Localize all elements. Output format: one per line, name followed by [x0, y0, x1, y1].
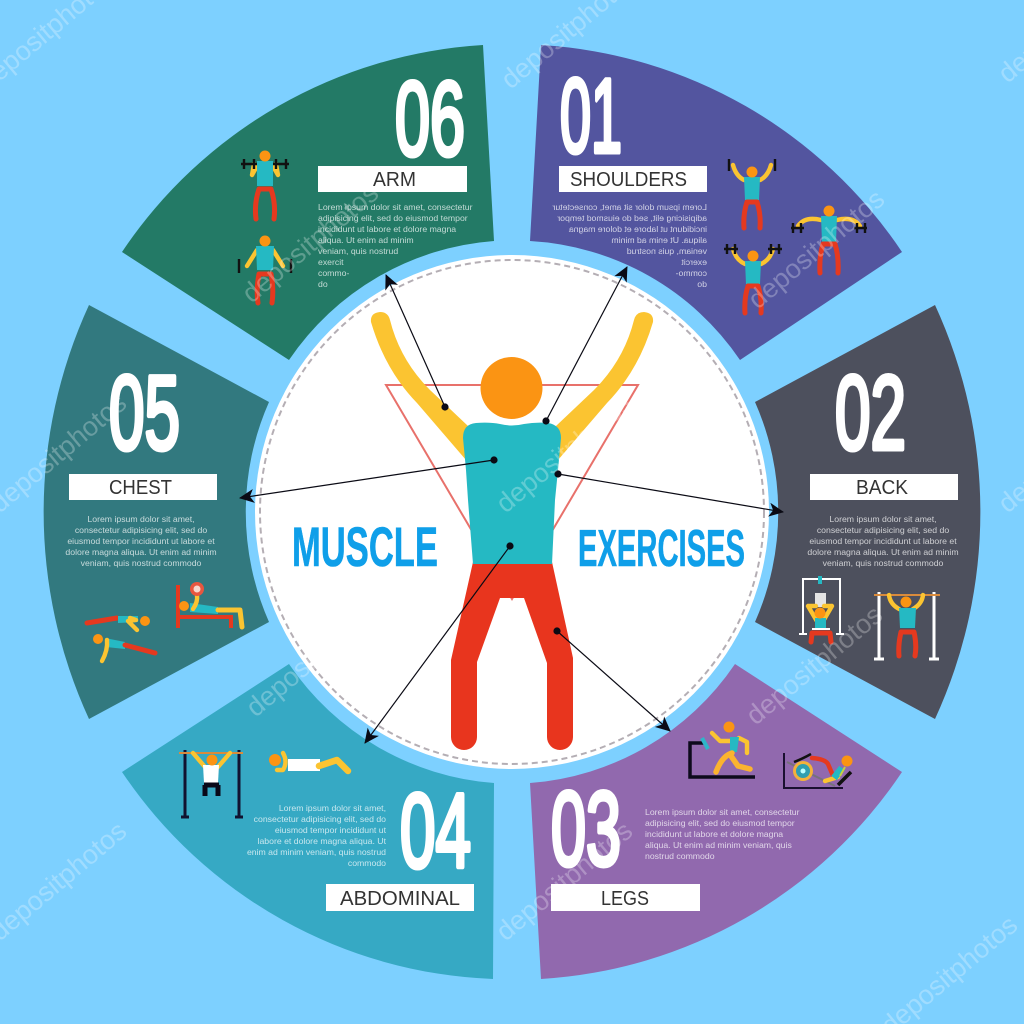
panel: 06 arm: ARM: [373, 169, 416, 191]
panel: 05 chest: dolore magna aliqua. Ut enim ad minim: [65, 547, 217, 557]
panel: 02 back: Lorem ipsum dolor sit amet,: [829, 514, 937, 524]
panel: 04 abdominal: consectetur adipisicing elit, sed do: [254, 814, 386, 824]
icon: hanging leg raise: [179, 750, 243, 817]
panel: 03 legs: LEGS: [601, 888, 649, 910]
panel: 05 chest: CHEST: [109, 477, 172, 499]
mirrored body text: adipisicing elit, sed do eiusmod tempor: [557, 213, 707, 223]
arrow: back: [554, 470, 783, 512]
icon: push-up top: [87, 616, 150, 630]
panel: 02 back: consectetur adipisicing elit, sed do: [817, 525, 949, 535]
mirrored body text: veniam, quis nostrud: [627, 246, 707, 256]
panel: 04 abdominal: Lorem ipsum dolor sit amet,: [279, 803, 386, 813]
panel: 06 arm: incididunt ut labore et dolore magna: [318, 224, 456, 234]
heading: exercises: EXERCISES: [578, 520, 745, 578]
panel: 05 chest: [44, 305, 269, 719]
icon: crunch exercise: [269, 753, 348, 771]
panel: 05 chest: consectetur adipisicing elit, sed do: [75, 525, 207, 535]
panel: 04 abdominal: commodo: [348, 858, 386, 868]
panel: 04 abdominal: ABDOMINAL: [340, 888, 460, 910]
panel: 03 legs: incididunt ut labore et dolore magna: [645, 829, 783, 839]
panel: 03 legs: aliqua. Ut enim ad minim veniam, quis: [645, 840, 792, 850]
central figure: [371, 312, 653, 750]
panel: 01 shoulders: [530, 45, 902, 360]
panel: 04 abdominal: 04: [400, 773, 471, 890]
icon: push-up bottom: [93, 634, 155, 661]
torso: [463, 423, 561, 564]
watermark text: depositphotos: [236, 178, 384, 309]
mirrored body text: do: [697, 279, 707, 289]
panel: 02 back: 02: [835, 355, 906, 472]
central white circle: [255, 255, 769, 769]
panel: 02 back: veniam, quis nostrud commodo: [823, 558, 944, 568]
right arm: [556, 312, 653, 460]
panel: 06 arm: Lorem ipsum dolor sit amet, consectetur: [318, 202, 473, 212]
panel: 06 arm: adipisicing elit, sed do eiusmod tempor: [318, 213, 468, 223]
panel: 02 back: BACK: [856, 477, 909, 499]
panel: 03 legs: adipisicing elit, sed do eiusmod tempor: [645, 818, 795, 828]
icon: lat pulldown machine: [799, 576, 844, 642]
panel: 03 legs: Lorem ipsum dolor sit amet, consectetur: [645, 807, 800, 817]
panel: 03 legs: nostrud commodo: [645, 851, 715, 861]
arrow: shoulders: [542, 267, 627, 425]
arrow: arm: [386, 275, 449, 411]
icon: figure shoulder curl: [241, 150, 289, 219]
mirrored body text: [552, 202, 707, 289]
panel: 05 chest: veniam, quis nostrud commodo: [81, 558, 202, 568]
heading: muscle: MUSCLE: [292, 515, 438, 578]
icon: treadmill runner: [690, 722, 755, 777]
triangle outline: [386, 385, 638, 599]
arrow: legs: [553, 627, 670, 731]
panel: 05 chest: 05: [109, 355, 180, 472]
head: [480, 357, 542, 419]
panel: 02 back: [755, 305, 980, 719]
icon: figure arm down: [239, 236, 291, 303]
panel: 06 arm: exercit: [318, 257, 344, 267]
mirrored body text: aliqua. Ut enim ad minim: [611, 235, 707, 245]
panel: 06 arm: [122, 45, 494, 360]
mirrored body text: exercit: [681, 257, 707, 267]
watermark text: depositphotos: [490, 388, 638, 519]
watermark text: depositphotos: [490, 816, 638, 947]
watermark text: depositphotos: [742, 184, 890, 315]
panel: 05 chest: Lorem ipsum dolor sit amet,: [87, 514, 195, 524]
mirrored body text: Lorem ipsum dolor sit amet, consectetur: [552, 202, 707, 212]
panel: 02 back: dolore magna aliqua. Ut enim ad minim: [807, 547, 959, 557]
panel: 06 arm: veniam, quis nostrud: [318, 246, 398, 256]
panel: 06 arm: aliqua. Ut enim ad minim: [318, 235, 414, 245]
arrow: abdominal: [365, 542, 514, 743]
legs: [451, 562, 573, 750]
icon: pull-up bar: [874, 592, 940, 659]
panel: 06 arm: do: [318, 279, 328, 289]
mirrored body text: commo-: [676, 268, 707, 278]
panel: 06 arm: commo-: [318, 268, 349, 278]
panel: 04 abdominal: [122, 664, 494, 979]
arrow: chest: [240, 456, 498, 498]
icon: figure lateral raise: [791, 206, 867, 273]
panel: 04 abdominal: labore et dolore magna aliqua. Ut: [258, 836, 387, 846]
left arm: [371, 312, 468, 460]
panel: 04 abdominal: eiusmod tempor incididunt ut: [275, 825, 387, 835]
icon: leg press machine: [784, 753, 852, 788]
icon: bench press: [178, 582, 242, 628]
panel: 02 back: eiusmod tempor incididunt ut labore et: [809, 536, 957, 546]
icon: figure shoulder press: [729, 159, 775, 228]
panel: 01 shoulders: 01: [560, 58, 622, 175]
panel: 01 shoulders: SHOULDERS: [570, 169, 687, 191]
panel: 05 chest: eiusmod tempor incididunt ut labore et: [67, 536, 215, 546]
panel: 03 legs: 03: [551, 771, 621, 888]
watermark text: depositphotos: [740, 600, 888, 731]
panel: 04 abdominal: enim ad minim veniam, quis nostrud: [247, 847, 386, 857]
icon: figure overhead raise: [724, 244, 782, 313]
mirrored body text: incididunt ut labore et dolore magna: [569, 224, 707, 234]
panel: 06 arm: 06: [395, 61, 465, 178]
panel: 03 legs: [530, 664, 902, 979]
watermark text: depositphotos: [240, 592, 388, 723]
